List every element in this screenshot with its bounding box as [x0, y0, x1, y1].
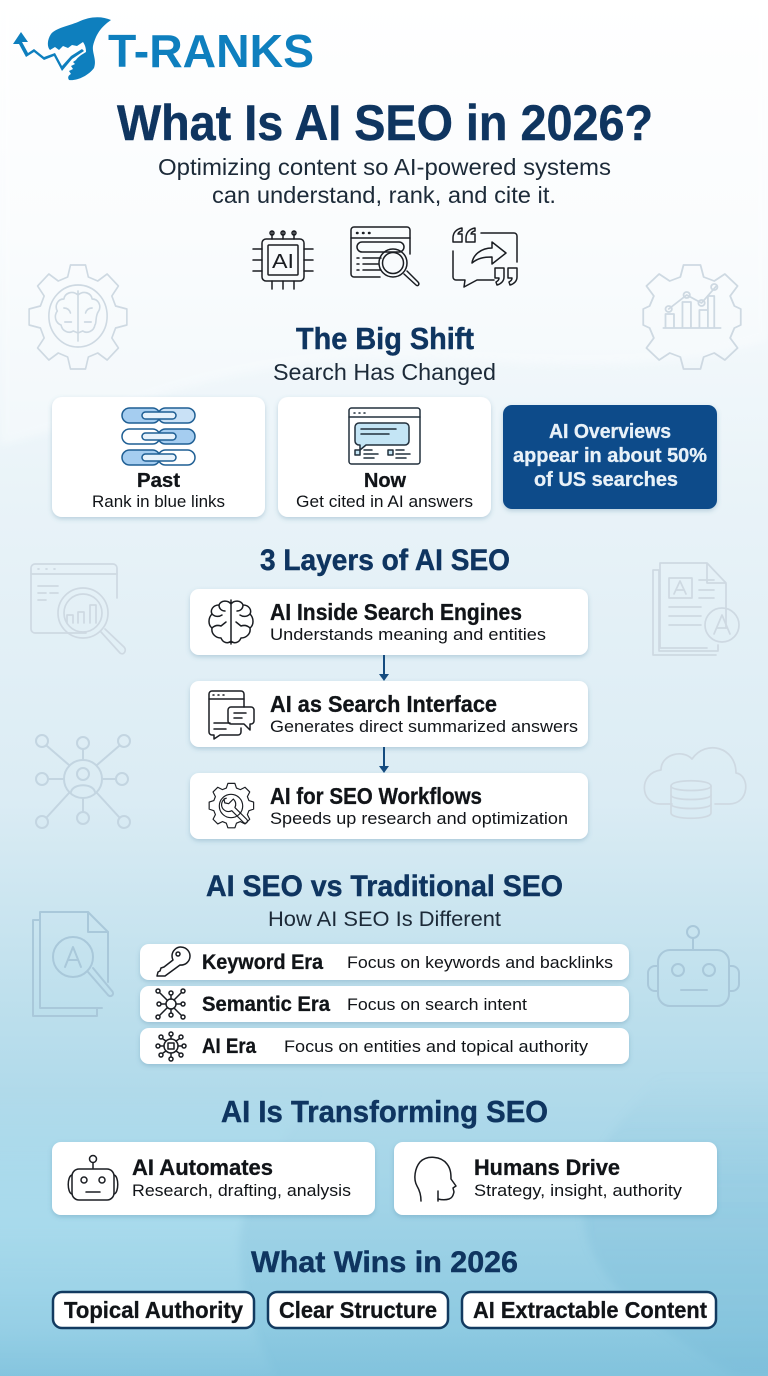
pill: clear structure: Clear Structure: [279, 1297, 437, 1323]
icon: cloud database: [644, 748, 746, 818]
card text: Rank in blue links: [92, 493, 225, 511]
card text: Research, drafting, analysis: [132, 1181, 351, 1200]
callout: AI overviews statistic: appear in about 50%: [513, 445, 707, 467]
card title: AI Automates: [132, 1155, 273, 1180]
era text: Focus on keywords and backlinks: [347, 953, 613, 972]
icon: people network: [36, 735, 130, 828]
icon: semantic network: [156, 989, 185, 1019]
icon: document search: [33, 912, 113, 1016]
icon: robot: [68, 1156, 118, 1200]
pill: clear structure: [268, 1292, 448, 1328]
pill: AI extractable content: [462, 1292, 716, 1328]
icon: browser search: [351, 227, 419, 286]
card title: Humans Drive: [474, 1155, 620, 1180]
layer title: AI Inside Search Engines: [270, 599, 522, 625]
icon: AI answer browser: [349, 408, 420, 464]
icon: document A: [653, 563, 739, 655]
panel: now: [278, 397, 491, 517]
icon: gear wrench: [209, 783, 254, 828]
background icons: [29, 265, 746, 1016]
icon: key: [157, 947, 190, 976]
pill: AI extractable content: AI Extractable Content: [473, 1297, 707, 1323]
card text: Strategy, insight, authority: [474, 1181, 683, 1200]
card title: Now: [364, 470, 406, 492]
row: AI era: [140, 1028, 629, 1064]
era name: AI Era: [202, 1035, 256, 1058]
subtitle: [158, 154, 611, 208]
icon: AI network: [156, 1032, 186, 1061]
heading: What Wins in 2026: What Wins in 2026: [251, 1246, 518, 1279]
callout: AI overviews statistic: [503, 405, 717, 509]
row: keyword era: [140, 944, 629, 980]
heading: AI Is Transforming SEO: AI Is Transforming SEO: [221, 1094, 548, 1129]
panel: layer 1: [190, 589, 588, 655]
panel: past: [52, 397, 265, 517]
icon: chart gear: [643, 265, 741, 369]
heading: AI SEO vs Traditional SEO: AI SEO vs Traditional SEO: [206, 870, 563, 903]
icon: brain: [209, 600, 253, 644]
icon: brain gear: [29, 265, 127, 369]
era name: Keyword Era: [202, 951, 323, 974]
title: What Is AI SEO in 2026?: [117, 95, 653, 151]
subheading: Search Has Changed: Search Has Changed: [273, 359, 496, 385]
layer text: Generates direct summarized answers: [270, 717, 578, 736]
icon: blue links: [122, 408, 195, 465]
layer text: Speeds up research and optimization: [270, 809, 568, 828]
icon: quote share: [453, 228, 517, 287]
card text: Get cited in AI answers: [296, 493, 473, 511]
panel: layer 2: [190, 681, 588, 747]
layer text: Understands meaning and entities: [270, 625, 546, 644]
era text: Focus on entities and topical authority: [284, 1037, 589, 1056]
era text: Focus on search intent: [347, 995, 527, 1014]
heading: 3 layers: 3 Layers of AI SEO: [260, 544, 510, 577]
panel: layer 3: [190, 773, 588, 839]
logo: T-RANKS: [13, 17, 314, 80]
arrow: [379, 747, 389, 773]
era name: Semantic Era: [202, 993, 330, 1016]
icon: browser chat: [209, 691, 254, 739]
arrow: [379, 655, 389, 681]
subtitle: Optimizing content so AI-powered systems: [158, 154, 611, 180]
icon: robot outline: [648, 926, 739, 1006]
row: semantic era: [140, 986, 629, 1022]
subheading: How AI SEO Is Different: How AI SEO Is Different: [268, 908, 501, 931]
callout: AI overviews statistic: of US searches: [534, 469, 678, 491]
subtitle: can understand, rank, and cite it.: [212, 182, 556, 208]
panel: humans drive: [394, 1142, 717, 1215]
heading: The Big Shift: The Big Shift: [296, 321, 474, 356]
layer title: AI for SEO Workflows: [270, 783, 482, 809]
callout: AI overviews statistic: AI Overviews: [549, 421, 671, 443]
icon: AI chip: [253, 231, 313, 289]
icon: human head: [415, 1157, 456, 1201]
pill: topical authority: Topical Authority: [64, 1297, 243, 1323]
wordmark: T-RANKS: [108, 25, 314, 77]
pill: topical authority: [53, 1292, 254, 1328]
header icons: [253, 227, 517, 289]
card title: Past: [137, 470, 180, 492]
panel: AI automates: [52, 1142, 375, 1215]
icon: dinosaur with rising chart arrow: [13, 17, 111, 80]
icon: browser analytics: [31, 564, 125, 654]
icon: AI chip: AI: [272, 251, 294, 273]
layer title: AI as Search Interface: [270, 691, 497, 717]
